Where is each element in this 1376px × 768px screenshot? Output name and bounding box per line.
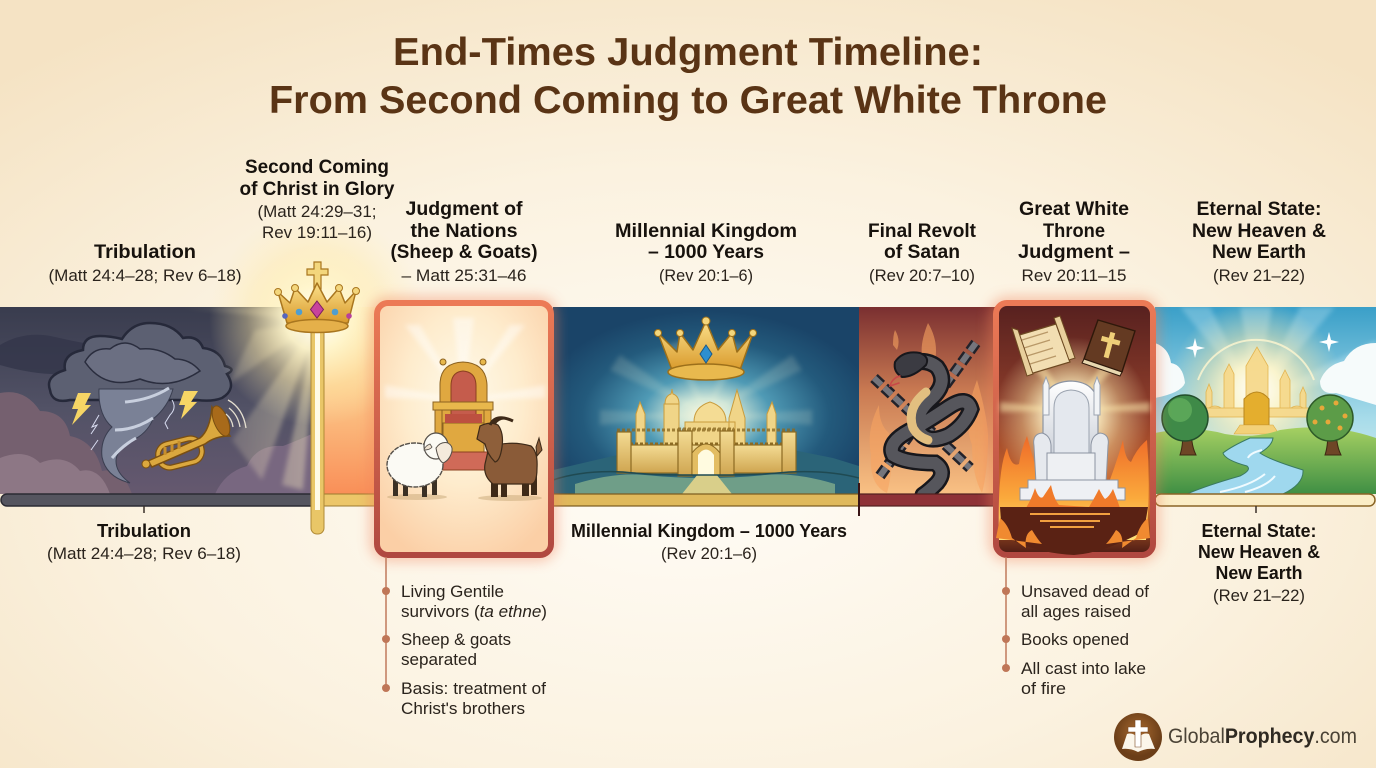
label: judgment of the nations: – Matt 25:31–46 bbox=[402, 267, 526, 285]
bullet list: judgment of the nations: survivors (ta ethne) bbox=[401, 603, 547, 621]
label: judgment of the nations: Judgment of bbox=[406, 199, 523, 220]
icon: lightning right bbox=[179, 391, 198, 419]
icon: sheep bbox=[387, 433, 452, 500]
icon: scroll bbox=[1012, 316, 1075, 376]
panel: tribulation band bbox=[0, 307, 317, 494]
bullet list: judgment of the nations bbox=[382, 557, 547, 718]
bullet list: great white throne bbox=[1002, 557, 1149, 698]
label: judgment of the nations: the Nations bbox=[410, 221, 518, 242]
label: second coming: Rev 19:11–16) bbox=[262, 224, 372, 242]
icon: tornado bbox=[99, 388, 173, 483]
label: eternal state top: (Rev 21–22) bbox=[1213, 267, 1305, 285]
label: tribulation top bbox=[48, 242, 242, 285]
label: judgment of the nations: (Sheep & Goats) bbox=[390, 242, 538, 263]
label: second coming: Second Coming bbox=[245, 157, 389, 178]
label: eternal state top: New Heaven & bbox=[1192, 221, 1326, 242]
icon: lake of fire bbox=[996, 485, 1150, 555]
icon: cross and bible bbox=[1114, 713, 1162, 761]
icon: right tree bbox=[1307, 395, 1353, 455]
label: final revolt of Satan: Final Revolt bbox=[868, 221, 977, 242]
timeline bar bbox=[1, 483, 1375, 516]
label: final revolt of Satan bbox=[868, 221, 977, 285]
bullet list: great white throne: All cast into lake bbox=[1021, 660, 1146, 678]
label: great white throne: Great White bbox=[1019, 199, 1129, 220]
icon: golden city bbox=[1203, 347, 1313, 417]
second coming glow bbox=[209, 210, 425, 426]
clouds bbox=[1155, 343, 1376, 405]
label: great white throne: Rev 20:11–15 bbox=[1022, 267, 1126, 285]
label: millennial kingdom below bbox=[571, 521, 847, 563]
bullet list: judgment of the nations: Living Gentile bbox=[401, 583, 504, 601]
label: great white throne: Judgment – bbox=[1018, 242, 1130, 263]
icon: golden castle bbox=[617, 389, 796, 476]
label: millennial kingdom top: – 1000 Years bbox=[648, 242, 764, 263]
icon: broken chains bbox=[874, 340, 978, 476]
flames bbox=[999, 436, 1149, 540]
label: second coming: of Christ in Glory bbox=[240, 179, 395, 200]
card: great white throne bbox=[994, 303, 1153, 555]
flames bbox=[870, 323, 988, 493]
label: final revolt of Satan: of Satan bbox=[884, 242, 960, 263]
label: great white throne: Throne bbox=[1043, 221, 1105, 242]
label: eternal state below: (Rev 21–22) bbox=[1213, 587, 1305, 605]
label: eternal state below bbox=[1198, 521, 1320, 605]
hills bbox=[553, 450, 859, 494]
card: judgment of the nations bbox=[376, 303, 551, 555]
icon: holy book bbox=[1082, 320, 1135, 376]
logo: GlobalProphecy.com: GlobalProphecy.com bbox=[1168, 725, 1357, 748]
icon: throne bbox=[433, 359, 493, 470]
panel: second coming band bbox=[323, 307, 378, 494]
title: End-Times Judgment Timeline: bbox=[393, 31, 983, 74]
icon: river of life bbox=[1187, 438, 1303, 494]
label: tribulation below bbox=[47, 521, 241, 563]
bullet list: great white throne: of fire bbox=[1021, 680, 1066, 698]
bullet list: great white throne: Books opened bbox=[1021, 631, 1129, 649]
label: eternal state below: New Heaven & bbox=[1198, 542, 1320, 562]
logo: GlobalProphecy.com bbox=[1114, 713, 1357, 761]
label: tribulation top: Tribulation bbox=[94, 242, 196, 263]
label: millennial kingdom top: Millennial Kingdom bbox=[615, 221, 797, 242]
label: tribulation below: Tribulation bbox=[97, 521, 191, 541]
icon: left tree bbox=[1162, 395, 1208, 455]
panel: eternal state band bbox=[1155, 302, 1376, 494]
label: second coming: (Matt 24:29–31; bbox=[258, 203, 376, 221]
bullet list: judgment of the nations: separated bbox=[401, 651, 477, 669]
panel: millennial kingdom band bbox=[553, 307, 859, 494]
icon: white throne bbox=[1020, 377, 1125, 500]
label: final revolt of Satan: (Rev 20:7–10) bbox=[869, 267, 975, 285]
icon: storm cloud bbox=[49, 323, 232, 401]
icon: serpent bbox=[890, 352, 971, 495]
panel: final revolt of Satan band bbox=[859, 307, 996, 495]
label: millennial kingdom below: Millennial Kingdom – 1000 Years bbox=[571, 521, 847, 541]
bullet list: judgment of the nations: Christ's brothers bbox=[401, 700, 525, 718]
title bbox=[269, 31, 1107, 122]
bullet list: judgment of the nations: Sheep & goats bbox=[401, 631, 511, 649]
icon: crown with cross bbox=[274, 262, 360, 332]
label: millennial kingdom below: (Rev 20:1–6) bbox=[661, 545, 757, 563]
label: eternal state below: Eternal State: bbox=[1202, 521, 1316, 541]
label: millennial kingdom top bbox=[615, 221, 797, 285]
icon: millennial crown bbox=[654, 317, 756, 380]
label: millennial kingdom top: (Rev 20:1–6) bbox=[659, 267, 753, 285]
label: judgment of the nations bbox=[390, 199, 538, 285]
title: From Second Coming to Great White Throne bbox=[269, 79, 1107, 122]
bullet list: great white throne: Unsaved dead of bbox=[1021, 583, 1149, 601]
icon: goat bbox=[477, 418, 542, 501]
icon: lightning left bbox=[72, 393, 91, 425]
label: tribulation top: (Matt 24:4–28; Rev 6–18) bbox=[48, 267, 242, 285]
label: eternal state top bbox=[1192, 199, 1326, 285]
gold staff bbox=[311, 325, 324, 534]
label: second coming bbox=[240, 157, 395, 242]
label: great white throne bbox=[1018, 199, 1130, 285]
label: eternal state top: Eternal State: bbox=[1196, 199, 1322, 220]
label: tribulation below: (Matt 24:4–28; Rev 6–18) bbox=[47, 545, 241, 563]
icon: trumpet bbox=[142, 400, 246, 470]
grass bbox=[1155, 427, 1376, 494]
icon: golden throne bbox=[1234, 392, 1279, 434]
bullet list: judgment of the nations: Basis: treatment of bbox=[401, 680, 546, 698]
label: eternal state below: New Earth bbox=[1216, 563, 1302, 583]
label: eternal state top: New Earth bbox=[1212, 242, 1306, 263]
bullet list: great white throne: all ages raised bbox=[1021, 603, 1131, 621]
